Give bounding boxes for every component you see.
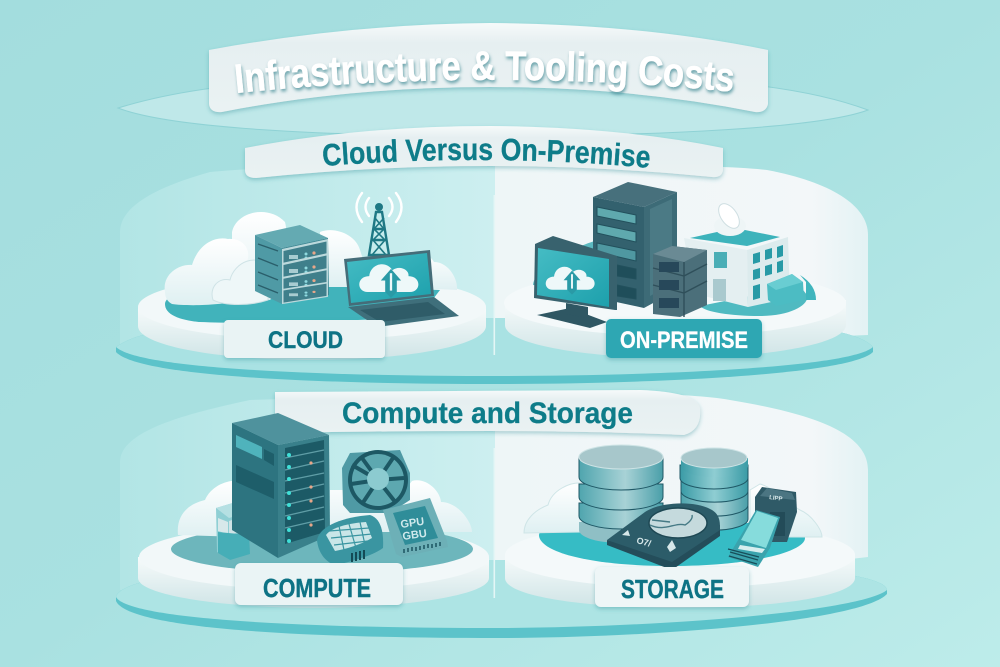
back wall left <box>120 165 495 355</box>
icon: clouds <box>524 483 822 537</box>
platform <box>138 274 486 360</box>
sub-panel: on-premise <box>504 182 846 358</box>
icon: memory card: LIPP <box>769 495 783 503</box>
icon: cooling fan <box>342 450 410 513</box>
title base disc <box>118 80 868 136</box>
icon: hard drive: O7/ <box>635 535 653 549</box>
label: cloud: CLOUD <box>268 327 343 354</box>
sub-panel: storage <box>505 445 855 608</box>
panel: compute and storage <box>116 390 887 638</box>
panel: cloud versus on-premise <box>116 126 873 384</box>
icon: clouds <box>178 480 472 537</box>
icon: database cylinder B <box>680 448 748 530</box>
title plaque <box>209 23 768 112</box>
sub-panel: cloud <box>138 193 486 360</box>
label: storage <box>595 567 749 607</box>
label: compute <box>235 563 403 605</box>
icon: gpu card: GPU <box>400 516 425 531</box>
divider <box>494 195 495 355</box>
icon: rack tower <box>593 182 677 308</box>
icon: hard drive <box>607 503 720 570</box>
title block <box>117 22 869 134</box>
icon: clouds <box>165 212 457 305</box>
sub-panel: compute <box>138 413 489 608</box>
base disc <box>116 560 887 638</box>
icon: building <box>684 200 816 307</box>
heading plaque <box>245 126 723 178</box>
heading text: Compute and Storage <box>342 397 633 430</box>
icon: server rack <box>255 225 329 304</box>
label: on-premise: ON-PREMISE <box>620 327 748 354</box>
back wall right <box>495 165 868 350</box>
heading plaque <box>275 390 700 435</box>
heading text: Cloud Versus On-Premise <box>323 138 650 168</box>
label: cloud <box>224 320 385 358</box>
label: compute: COMPUTE <box>263 573 371 603</box>
icon: compute tower <box>232 413 330 558</box>
back wall right <box>495 393 868 600</box>
divider <box>494 448 495 598</box>
icon: server stack <box>653 246 707 317</box>
icon: solid-state drive <box>728 510 780 567</box>
icon: gpu card <box>383 498 448 557</box>
platform <box>504 240 846 358</box>
platform <box>505 522 855 608</box>
icon: chip <box>317 515 383 565</box>
icon: database cylinder A <box>579 445 663 543</box>
icon: monitor <box>534 236 617 328</box>
icon: memory card <box>755 487 797 542</box>
icon: laptop <box>344 250 459 327</box>
icon: satellite dish <box>714 200 746 236</box>
icon: small boxes <box>216 502 250 560</box>
platform <box>138 524 489 608</box>
title text: Infrastructure & Tooling Costs <box>234 51 736 98</box>
icon: teal box <box>767 274 816 306</box>
back wall left <box>120 393 495 600</box>
label: storage: STORAGE <box>621 574 724 604</box>
icon: gpu card: GBU <box>402 528 428 543</box>
label: on-premise <box>606 319 762 358</box>
icon: antenna tower <box>356 193 402 255</box>
base disc <box>116 318 873 384</box>
